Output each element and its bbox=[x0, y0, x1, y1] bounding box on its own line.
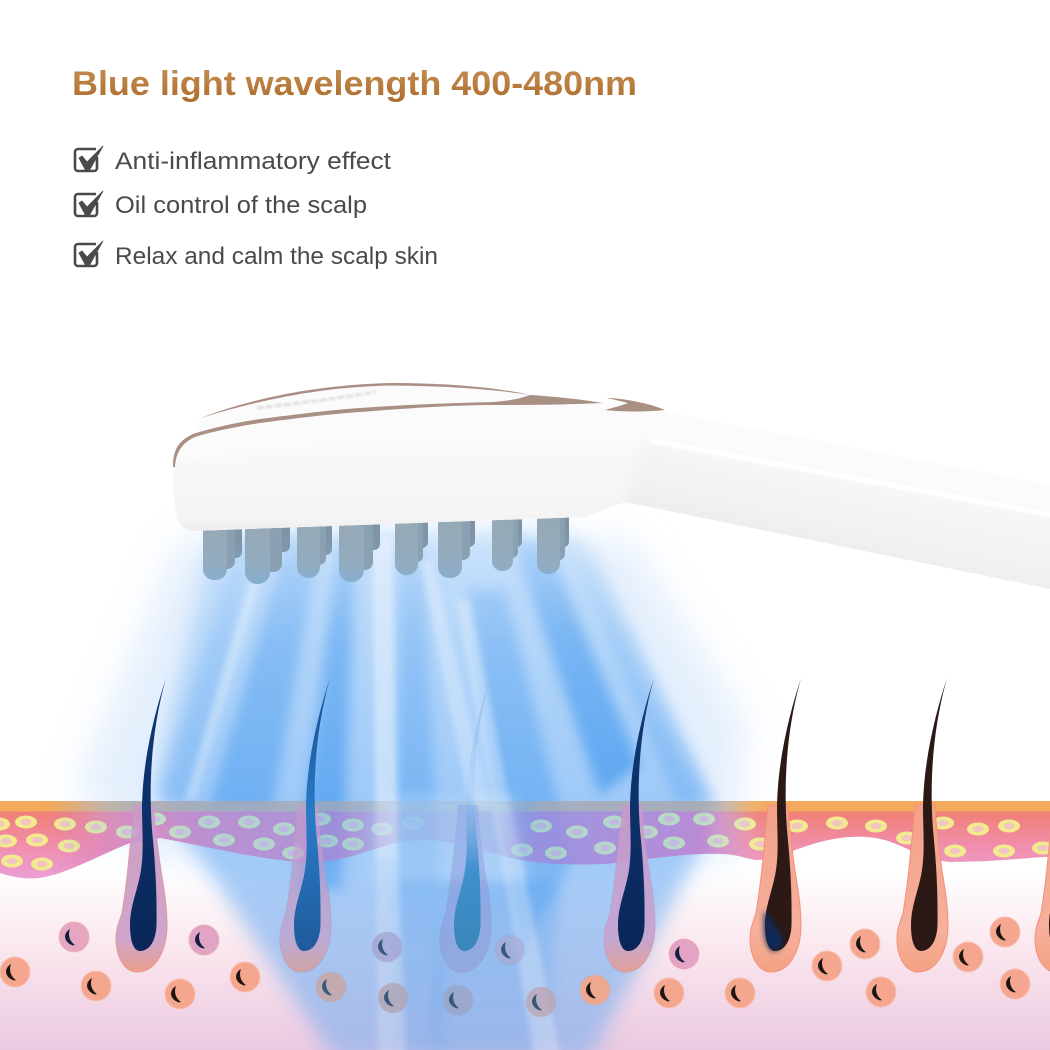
central band wash bbox=[362, 795, 530, 880]
hair 5 blue root bbox=[764, 910, 783, 951]
hair 3 bbox=[454, 678, 490, 951]
benefit: anti-inflammatory: Anti-inflammatory effect bbox=[115, 148, 391, 175]
title: Blue light wavelength 400-480nm bbox=[72, 65, 637, 103]
hair 7 bbox=[1049, 678, 1050, 951]
hair 4 bbox=[618, 678, 654, 951]
strong left ray bbox=[208, 530, 322, 810]
wide faint glow bbox=[75, 540, 745, 860]
hair 5 bbox=[765, 678, 801, 951]
strong right ray bbox=[512, 540, 640, 795]
body silhouette bbox=[173, 383, 1050, 589]
white streak centre bbox=[372, 540, 398, 860]
fat cells bbox=[0, 812, 1050, 870]
mid-left ray bbox=[296, 540, 356, 890]
main fan bbox=[154, 530, 705, 1050]
tinted melanocytes bbox=[59, 922, 699, 1017]
handle shaded face bbox=[646, 474, 1050, 589]
brush device bbox=[170, 383, 1050, 610]
hairs bbox=[130, 678, 1050, 951]
body shading bbox=[180, 468, 1050, 589]
benefit: relax: Relax and calm the scalp skin bbox=[115, 243, 438, 270]
hair 1 bbox=[130, 678, 166, 951]
centre ray bbox=[395, 540, 448, 1050]
white streak lower bbox=[376, 860, 406, 1050]
epidermis band bbox=[0, 811, 1050, 878]
blue light beams bbox=[75, 530, 745, 1050]
skin cross-section bbox=[0, 801, 1050, 1050]
button bbox=[605, 398, 665, 412]
right edge ray bbox=[568, 540, 716, 805]
handle highlight bbox=[650, 438, 1050, 517]
comb teeth bbox=[203, 505, 569, 584]
hair 2 bbox=[294, 678, 330, 951]
stratum corneum bbox=[0, 801, 1050, 812]
skin tinted under light bbox=[0, 801, 1050, 1017]
white streak left bbox=[184, 540, 272, 800]
left edge ray bbox=[160, 540, 256, 800]
follicle sheaths bbox=[116, 805, 1050, 972]
melanocytes bbox=[0, 917, 1030, 1017]
taupe upper trim bbox=[201, 383, 530, 418]
tinted band bbox=[61, 801, 743, 868]
benefit: oil control: Oil control of the scalp bbox=[115, 192, 367, 219]
white streak mid bbox=[420, 560, 492, 810]
benefit list bbox=[75, 146, 438, 270]
head front face bbox=[180, 518, 568, 531]
lower-right ray bbox=[468, 590, 572, 960]
hair 6 bbox=[911, 678, 947, 951]
melanocyte nuclei bbox=[6, 924, 1016, 1002]
tinted follicles bbox=[116, 805, 655, 972]
dermis bbox=[0, 835, 1050, 1050]
taupe lower trim bbox=[173, 395, 603, 467]
logo bbox=[257, 392, 376, 408]
lower column bbox=[428, 880, 560, 1050]
white streak right bbox=[456, 600, 560, 1050]
